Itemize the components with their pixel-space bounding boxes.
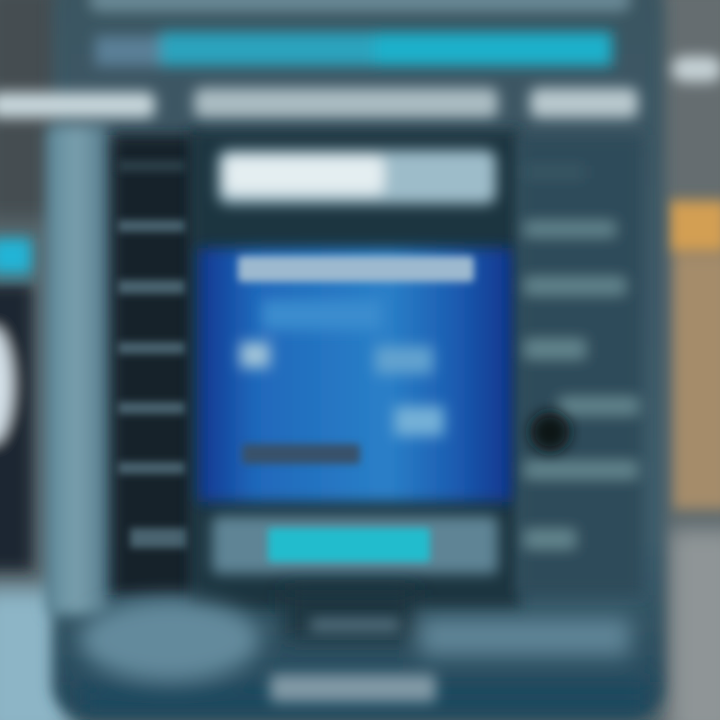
small label above bottom — [310, 618, 400, 632]
cyan button — [268, 528, 430, 562]
black dot — [530, 412, 570, 452]
background: dark object at left — [0, 238, 32, 570]
top cyan header bar — [95, 32, 612, 66]
dark panel label — [242, 444, 360, 464]
background: orange object at right — [668, 200, 720, 510]
lower device ledge — [80, 590, 650, 712]
blue screen panel — [198, 248, 514, 502]
left column labels — [118, 160, 188, 548]
left column with dark stripes — [112, 135, 198, 595]
panel highlights — [240, 300, 444, 436]
right column stripes — [518, 135, 643, 595]
white blurred heading row — [0, 56, 720, 118]
white title box — [218, 150, 496, 204]
left side band — [46, 125, 108, 615]
light panel heading bar — [238, 256, 474, 282]
grey bottom label — [270, 674, 436, 702]
dark column around centre — [190, 130, 520, 610]
bottom action bar — [212, 516, 498, 574]
